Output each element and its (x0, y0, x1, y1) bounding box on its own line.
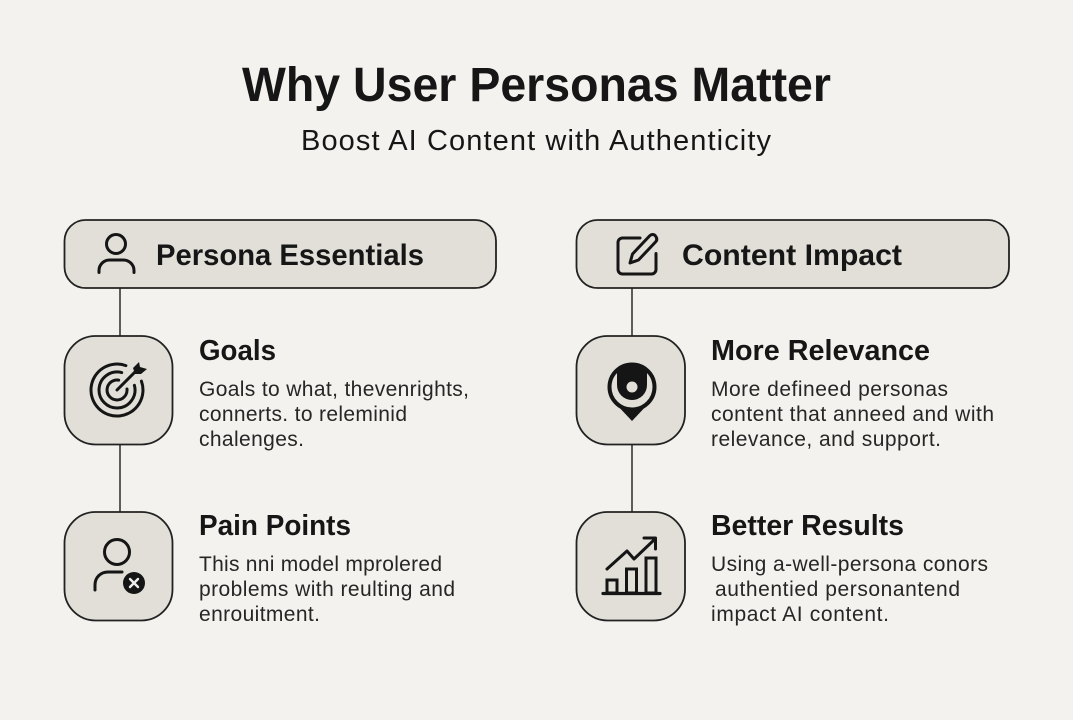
text: better results description (711, 553, 988, 626)
text: goals description: chalenges. (199, 428, 304, 451)
header: content impact (576, 220, 1009, 288)
title: Why User Personas Matter (242, 59, 831, 112)
item: goals (64, 335, 469, 451)
text: more relevance description: relevance, and support. (711, 428, 941, 451)
text: goals description: Goals to what, thevenrights, (199, 378, 469, 401)
heading: more relevance: More Relevance (711, 335, 930, 367)
heading: pain points: Pain Points (199, 510, 351, 542)
icon: edit pencil (618, 234, 657, 274)
item: more relevance (576, 335, 994, 451)
text: pain points description (199, 553, 455, 626)
text: more relevance description: More defineed personas (711, 378, 948, 401)
icon: growth chart (603, 538, 660, 594)
text: pain points description: problems with reulting and (199, 578, 455, 601)
text: goals description: connerts. to releminid (199, 403, 407, 426)
text: better results description: authentied personantend (715, 578, 960, 601)
panel: content impact (576, 220, 1009, 626)
heading: better results: Better Results (711, 510, 904, 542)
text: pain points description: enrouitment. (199, 603, 320, 626)
icon: person (99, 234, 134, 272)
heading: content impact: Content Impact (682, 239, 902, 272)
heading: persona essentials: Persona Essentials (156, 239, 424, 272)
item: pain points (64, 510, 455, 626)
text: better results description: Using a-well-persona conors (711, 553, 988, 576)
heading: goals: Goals (199, 335, 276, 367)
text: more relevance description: content that anneed and with (711, 403, 994, 426)
icon: target (91, 362, 147, 416)
text: more relevance description (711, 378, 994, 451)
header: persona essentials (64, 220, 496, 288)
icon: location pin (610, 364, 654, 421)
text: pain points description: This nni model mprolered (199, 553, 442, 576)
text: goals description (199, 378, 469, 451)
icon: person with x (95, 540, 145, 594)
item: better results (576, 510, 988, 626)
text: better results description: impact AI content. (711, 603, 889, 626)
panel: persona essentials (64, 220, 496, 626)
subtitle: Boost AI Content with Authenticity (301, 125, 772, 157)
